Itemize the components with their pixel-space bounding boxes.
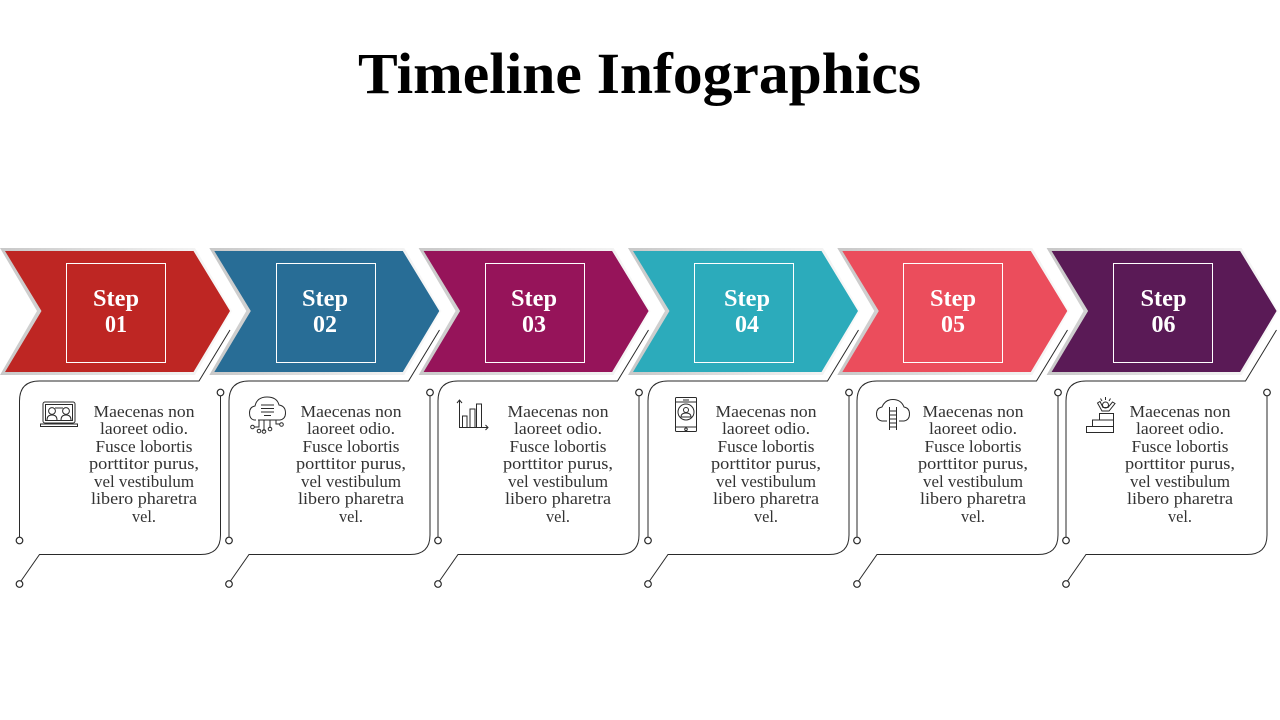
panel outline 6 — [1063, 330, 1276, 587]
step 4 text — [711, 402, 821, 526]
step 3 text: laoreet odio. — [514, 419, 602, 438]
chevron 2 — [209, 248, 441, 375]
step 5 — [837, 248, 1069, 587]
step 2 text: vel vestibulum — [301, 472, 401, 491]
step 3 text: vel vestibulum — [508, 472, 608, 491]
step 3 text — [503, 402, 613, 526]
panel outline 1 — [16, 330, 230, 587]
step 5 label — [904, 264, 1002, 362]
step 5 text: porttitor purus, — [918, 454, 1028, 473]
step 1 text: vel vestibulum — [94, 472, 194, 491]
step 6 text: laoreet odio. — [1136, 419, 1224, 438]
step 6 — [1047, 248, 1279, 587]
panel outline 3 — [435, 330, 648, 587]
step 4 label: Step — [724, 286, 770, 312]
step 3 — [419, 248, 651, 587]
step 2 label — [276, 264, 376, 362]
icon: cloud with ladder — [876, 400, 910, 430]
step 6 label: 06 — [1152, 312, 1176, 338]
step 2 label: 02 — [313, 312, 337, 338]
step 4 text: libero pharetra — [713, 489, 820, 508]
step 3 label: Step — [511, 286, 557, 312]
step 4 — [628, 248, 860, 587]
step 1 label: Step — [93, 286, 139, 312]
step 3 text: vel. — [546, 507, 570, 526]
step 4 label — [694, 264, 794, 362]
step 3 text: Fusce lobortis — [510, 437, 606, 456]
step 1 label: 01 — [105, 312, 127, 338]
step 4 text: laoreet odio. — [722, 419, 810, 438]
step 5 text: Maecenas non — [922, 402, 1024, 421]
step 5 text: libero pharetra — [920, 489, 1027, 508]
chevron 5 — [837, 248, 1069, 375]
icon: person on stairs — [1086, 397, 1115, 432]
step 6 text: vel vestibulum — [1130, 472, 1230, 491]
step 4 text: vel. — [754, 507, 778, 526]
step 6 text: Fusce lobortis — [1132, 437, 1228, 456]
step 1 text — [89, 402, 199, 526]
step 4 text: Fusce lobortis — [718, 437, 814, 456]
icon: phone with person — [676, 398, 696, 432]
panel outline 5 — [854, 330, 1068, 587]
step 4 text: vel vestibulum — [716, 472, 816, 491]
step 3 text: porttitor purus, — [503, 454, 613, 473]
step 6 label: Step — [1140, 286, 1186, 312]
icon: cloud network — [250, 397, 286, 433]
step 5 label: Step — [930, 286, 976, 312]
chevron 6 — [1047, 248, 1279, 375]
step 3 text: libero pharetra — [505, 489, 612, 508]
step 4 text: Maecenas non — [716, 402, 816, 421]
step 5 text: Fusce lobortis — [924, 437, 1022, 456]
step 6 text: libero pharetra — [1127, 489, 1234, 508]
chevron 3 — [419, 248, 651, 375]
step 3 text: Maecenas non — [508, 402, 608, 421]
step 2 — [209, 248, 441, 587]
step 6 text: vel. — [1168, 507, 1192, 526]
step 5 text: laoreet odio. — [929, 419, 1017, 438]
chevron 4 — [628, 248, 860, 375]
step 2 text: Fusce lobortis — [302, 437, 400, 456]
step 1 text: vel. — [132, 507, 156, 526]
step 2 text: vel. — [339, 507, 363, 526]
icon: bar chart — [457, 400, 488, 430]
step 1 text: libero pharetra — [91, 489, 198, 508]
step 2 text: libero pharetra — [298, 489, 405, 508]
step 6 label — [1114, 264, 1212, 362]
step 1 — [0, 248, 232, 587]
step 5 text: vel. — [961, 507, 985, 526]
step 6 text — [1125, 402, 1235, 526]
step 1 text: Maecenas non — [94, 402, 194, 421]
step 6 text: porttitor purus, — [1125, 454, 1235, 473]
step 2 label: Step — [302, 286, 348, 312]
step 2 text: laoreet odio. — [307, 419, 395, 438]
panel outline 2 — [226, 330, 440, 587]
icon: laptop with people — [40, 402, 78, 426]
step 5 label: 05 — [941, 312, 965, 338]
chevron 1 — [0, 248, 232, 375]
title: Timeline Infographics — [358, 41, 921, 106]
step 3 label: 03 — [522, 312, 546, 338]
step 5 text: vel vestibulum — [923, 472, 1023, 491]
step 3 label — [486, 264, 584, 362]
step 1 text: Fusce lobortis — [96, 437, 192, 456]
step 4 text: porttitor purus, — [711, 454, 821, 473]
step 4 label: 04 — [735, 312, 759, 338]
step 1 text: laoreet odio. — [100, 419, 188, 438]
step 2 text: Maecenas non — [300, 402, 402, 421]
step 6 text: Maecenas non — [1130, 402, 1230, 421]
step 1 label — [66, 264, 166, 362]
step 5 text — [918, 402, 1028, 526]
step 2 text: porttitor purus, — [296, 454, 406, 473]
step 2 text — [296, 402, 406, 526]
step 1 text: porttitor purus, — [89, 454, 199, 473]
panel outline 4 — [645, 330, 858, 587]
